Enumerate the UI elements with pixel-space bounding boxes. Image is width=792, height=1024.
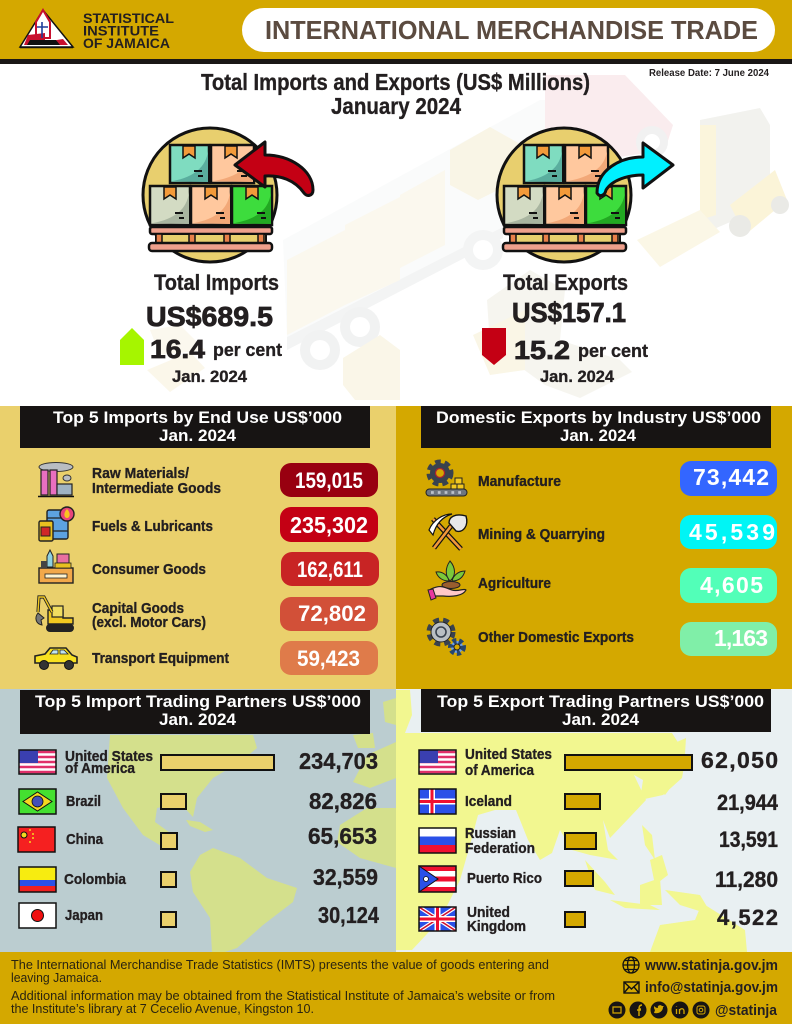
- name: United: [467, 904, 510, 921]
- bar: [161, 755, 274, 770]
- total exports value: US$157.1: [512, 297, 626, 328]
- arrow: imports red: [235, 142, 313, 195]
- agriculture value: [680, 568, 777, 603]
- value: 65,653: [308, 823, 377, 849]
- imports change unit: per cent: [213, 339, 282, 360]
- bar: [565, 833, 596, 849]
- email: info@statinja.gov.jm: [645, 979, 778, 996]
- value: 21,944: [717, 790, 779, 815]
- panel heading: [421, 406, 771, 448]
- panel heading: Jan. 2024: [159, 711, 237, 729]
- raw materials label: [92, 465, 221, 497]
- map: the Americas: [107, 698, 396, 952]
- bar: [161, 872, 176, 887]
- row: Iceland: [419, 789, 779, 815]
- exports change: 15.2: [514, 335, 570, 365]
- name: [465, 746, 552, 779]
- agriculture label: Agriculture: [478, 575, 551, 592]
- value: 13,591: [719, 827, 778, 852]
- name: Kingdom: [467, 918, 526, 935]
- icon: car: [35, 648, 77, 670]
- mining label: Mining & Quarrying: [478, 526, 605, 543]
- row: Puerto Rico: [419, 866, 778, 892]
- transport equipment value: 59,423: [297, 646, 360, 671]
- header band: [0, 0, 792, 64]
- main heading: [201, 69, 590, 119]
- flag: Brazil: [19, 789, 56, 814]
- icon: pick and shovel: [429, 514, 467, 549]
- footer description: Additional information may be obtained from the Statistical Institute of Jamaica’s website or from: [11, 989, 555, 1003]
- footer description: [11, 958, 555, 1016]
- bar: [161, 794, 186, 809]
- row: Colombia: [19, 864, 378, 892]
- icon: excavator: [36, 597, 74, 632]
- manufacture value: 73,442: [693, 464, 769, 490]
- flag: USA: [419, 750, 456, 774]
- arrow: exports cyan: [597, 143, 673, 196]
- name: of America: [65, 760, 136, 777]
- icon: export crates on pallet: [497, 128, 631, 262]
- panel heading: [20, 690, 370, 734]
- exports summary: [482, 128, 673, 386]
- manufacture label: Manufacture: [478, 473, 561, 490]
- name: Brazil: [66, 793, 101, 810]
- mining value: 45,539: [689, 519, 775, 545]
- flag: Colombia: [19, 867, 56, 892]
- panel: top 5 export trading partners: [396, 689, 792, 952]
- release date: Release Date: 7 June 2024: [649, 68, 769, 79]
- capital goods label: Capital Goods: [92, 600, 184, 617]
- panel heading: Jan. 2024: [560, 427, 637, 445]
- name: Colombia: [64, 871, 127, 888]
- row: China: [18, 823, 377, 852]
- capital goods value: 72,802: [298, 601, 366, 626]
- bar: [161, 833, 177, 849]
- website: www.statinja.gov.jm: [644, 957, 778, 974]
- capital goods label: (excl. Motor Cars): [92, 614, 206, 631]
- fuels label: Fuels & Lubricants: [92, 518, 213, 535]
- icon: factory: [38, 462, 74, 496]
- icon: institute logo: [20, 10, 73, 48]
- exports period: Jan. 2024: [540, 367, 615, 386]
- icon: fuel barrel and can: [39, 507, 74, 541]
- mining value: [680, 515, 777, 549]
- panel: top 5 import trading partners: [0, 689, 396, 952]
- panel heading: Top 5 Export Trading Partners US$’000: [437, 693, 764, 711]
- imports summary: [120, 128, 313, 386]
- value: 82,826: [309, 788, 377, 814]
- row: United States: [19, 748, 378, 777]
- name: United States: [65, 748, 153, 765]
- bar: [565, 912, 585, 927]
- name: United States: [465, 746, 552, 763]
- panel heading: [20, 406, 370, 448]
- footer description: leaving Jamaica.: [11, 971, 102, 985]
- footer description: The International Merchandise Trade Statistics (IMTS) presents the value of goods entering and: [11, 958, 549, 972]
- raw materials label: Raw Materials/: [92, 465, 190, 482]
- panel: domestic exports by industry: [396, 406, 792, 689]
- flag: China: [18, 827, 55, 852]
- icon: import crates on pallet: [143, 128, 277, 262]
- panel heading: [421, 689, 771, 732]
- name: Puerto Rico: [467, 870, 542, 887]
- logo wordmark: [83, 10, 174, 51]
- other domestic exports label: Other Domestic Exports: [478, 629, 634, 646]
- icon: up indicator: [120, 328, 144, 365]
- icon: other gears: [430, 622, 463, 653]
- panel heading: Jan. 2024: [159, 427, 237, 445]
- footer: [0, 952, 792, 1024]
- value: 30,124: [318, 902, 379, 928]
- flag: United Kingdom: [419, 907, 456, 931]
- title pill: [242, 8, 775, 52]
- logo wordmark: OF JAMAICA: [83, 35, 170, 51]
- value: 11,280: [715, 867, 778, 892]
- fuels value: 235,302: [290, 512, 368, 538]
- faded background illustration: truck and forklifts: [147, 75, 789, 400]
- row: Japan: [19, 902, 379, 928]
- name: Iceland: [465, 793, 512, 810]
- value: 32,559: [313, 864, 378, 890]
- fuels value: [280, 507, 378, 542]
- value: 4,522: [717, 905, 778, 930]
- icon: envelope: [624, 982, 639, 993]
- icon: consumer goods shelf: [39, 550, 73, 583]
- main heading: Total Imports and Exports (US$ Millions): [201, 69, 590, 95]
- manufacture value: [680, 461, 777, 496]
- row: Brazil: [19, 788, 377, 814]
- flag: Russia: [419, 828, 456, 853]
- capital goods label: [92, 600, 206, 631]
- logo wordmark: INSTITUTE: [83, 22, 159, 38]
- icon: down indicator: [482, 328, 506, 365]
- row: United States: [419, 746, 778, 779]
- total exports label: Total Exports: [503, 270, 628, 295]
- panel heading: Jan. 2024: [562, 711, 640, 729]
- imports period: Jan. 2024: [172, 367, 248, 386]
- consumer goods value: [281, 552, 379, 586]
- icon: globe: [623, 957, 639, 973]
- bar: [161, 912, 176, 927]
- footer description: the Institute’s library at 7 Cecelio Avenue, Kingston 10.: [11, 1002, 314, 1016]
- other domestic exports value: [680, 622, 777, 656]
- raw materials value: [280, 463, 378, 497]
- icon: plant in hand: [428, 561, 466, 600]
- name: Federation: [465, 840, 535, 857]
- value: 234,703: [299, 748, 378, 774]
- name: [65, 748, 153, 777]
- flag: Puerto Rico: [419, 866, 456, 892]
- row: Russian Federation: [419, 825, 778, 857]
- social handle: @statinja: [715, 1002, 778, 1019]
- flag: USA: [19, 750, 56, 774]
- raw materials value: 159,015: [295, 468, 363, 493]
- transport equipment value: [280, 641, 378, 675]
- value: 62,050: [701, 747, 778, 773]
- consumer goods value: 162,611: [297, 557, 363, 582]
- bar: [565, 794, 600, 809]
- row: United Kingdom: [419, 904, 778, 935]
- other domestic exports value: 1,163: [714, 625, 768, 651]
- name: Russian: [465, 825, 516, 842]
- imports change: 16.4: [150, 334, 206, 364]
- panel heading: Top 5 Imports by End Use US$’000: [53, 409, 342, 427]
- logo wordmark: STATISTICAL: [83, 10, 174, 26]
- panel heading: Domestic Exports by Industry US$’000: [436, 409, 761, 427]
- icon: manufacture gear and conveyor: [426, 463, 467, 496]
- agriculture value: 4,605: [700, 572, 763, 598]
- transport equipment label: Transport Equipment: [92, 650, 229, 667]
- main heading: January 2024: [331, 93, 461, 119]
- raw materials label: Intermediate Goods: [92, 480, 221, 497]
- name: China: [66, 831, 104, 848]
- total imports value: US$689.5: [146, 301, 273, 332]
- total imports label: Total Imports: [154, 270, 279, 295]
- exports change unit: per cent: [578, 340, 648, 361]
- consumer goods label: Consumer Goods: [92, 561, 206, 578]
- name: Japan: [65, 907, 103, 924]
- map: Asia, Africa and Australia: [396, 690, 747, 952]
- name: of America: [465, 762, 535, 779]
- bar: [565, 871, 593, 886]
- social icons: [608, 1002, 710, 1018]
- capital goods value: [280, 597, 378, 631]
- panel heading: Top 5 Import Trading Partners US$’000: [35, 693, 361, 711]
- name: [467, 904, 526, 935]
- panel: top 5 imports by end use: [0, 406, 396, 689]
- name: [465, 825, 535, 857]
- flag: Iceland: [419, 789, 456, 814]
- title pill: INTERNATIONAL MERCHANDISE TRADE: [265, 15, 758, 45]
- flag: Japan: [19, 903, 56, 928]
- bar: [565, 755, 692, 770]
